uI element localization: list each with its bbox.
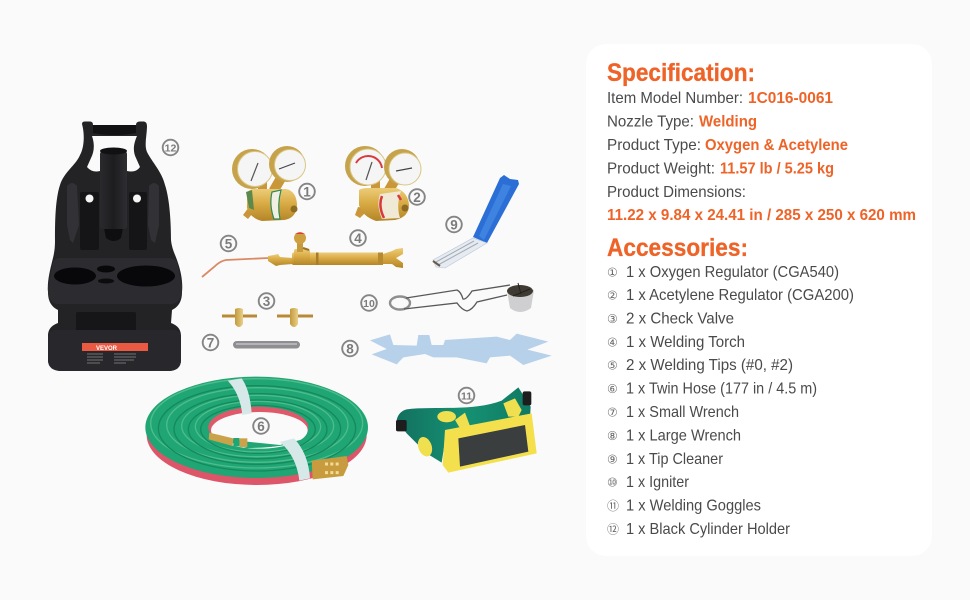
badge 9	[446, 217, 462, 232]
list: accessories	[607, 264, 854, 538]
badge 12	[163, 140, 178, 155]
list: accessories: 1 x Tip Cleaner	[626, 451, 724, 468]
badge 6	[253, 418, 269, 434]
icon: tip cleaner	[433, 175, 519, 268]
list: accessories: 1 x Black Cylinder Holder	[626, 521, 791, 538]
badge 4	[350, 230, 366, 246]
text block: specification rows: 11.22 x 9.84 x 24.41 in / 285 x 250 x 620 mm	[607, 207, 916, 224]
panel: specification and accessories card	[586, 44, 932, 556]
badge 7	[203, 335, 218, 350]
badge 8	[342, 341, 358, 356]
label: VEVOR sticker	[82, 343, 148, 363]
badge 4: 4	[354, 231, 362, 246]
text block: specification rows: Welding	[699, 114, 757, 130]
icon: check valves	[222, 308, 313, 327]
list: accessories: 1 x Welding Torch	[626, 334, 745, 351]
list: accessories: ⑦	[607, 406, 618, 420]
list: accessories: 1 x Igniter	[626, 474, 690, 491]
text block: specification rows: Oxygen & Acetylene	[705, 137, 848, 154]
text block: specification rows	[607, 90, 916, 224]
list: accessories: ⑥	[607, 382, 618, 396]
text block: specification rows: 1C016-0061	[748, 90, 833, 107]
badge 1: 1	[303, 184, 311, 199]
list: accessories: ⑫	[607, 522, 619, 536]
text block: specification rows: Item Model Number:	[607, 90, 743, 107]
badge 3	[259, 293, 274, 309]
badge 3: 3	[263, 294, 271, 309]
badge 5: 5	[225, 236, 233, 251]
list: accessories: ②	[607, 288, 618, 302]
text block: specification rows: Nozzle Type:	[607, 114, 694, 130]
badge 6: 6	[257, 419, 265, 434]
list: accessories: 1 x Large Wrench	[626, 428, 741, 444]
icon: twin hose	[145, 377, 368, 485]
icon: small wrench	[233, 341, 300, 348]
heading: specification: Specification:	[607, 59, 755, 87]
list: accessories: 2 x Check Valve	[626, 310, 734, 328]
badge 2	[409, 189, 425, 205]
badge 5	[221, 236, 236, 251]
list: accessories: ⑨	[607, 452, 618, 466]
badge 10	[361, 295, 377, 311]
icon: black cylinder holder	[48, 122, 182, 371]
text block: specification rows: Product Dimensions:	[607, 184, 746, 201]
list: accessories: 1 x Oxygen Regulator (CGA540)	[626, 264, 839, 281]
badge 1	[299, 184, 315, 199]
list: accessories: 1 x Welding Goggles	[626, 498, 761, 514]
label: VEVOR sticker: VEVOR	[96, 346, 118, 352]
badge 12: 12	[165, 142, 176, 154]
list: accessories: ⑤	[607, 358, 618, 372]
text block: specification rows: Product Type:	[607, 137, 701, 154]
list: accessories: ①	[607, 266, 618, 280]
badge 11	[459, 388, 474, 403]
list: accessories: ④	[607, 336, 618, 350]
list: accessories: 1 x Acetylene Regulator (CGA200)	[626, 287, 854, 304]
icon: igniter	[390, 283, 534, 312]
icon: large wrench	[370, 334, 552, 365]
badge 9: 9	[450, 217, 458, 232]
heading: accessories: Accessories:	[607, 234, 748, 262]
text block: specification rows: Product Weight:	[607, 160, 715, 178]
list: accessories: ⑧	[607, 429, 618, 443]
icon: acetylene regulator	[345, 146, 421, 221]
list: accessories: ③	[607, 312, 618, 326]
badge 2: 2	[413, 190, 421, 205]
list: accessories: 1 x Small Wrench	[626, 404, 739, 421]
badge 11: 11	[461, 390, 472, 402]
list: accessories: 2 x Welding Tips (#0, #2)	[626, 357, 793, 374]
icon: welding tip	[202, 258, 269, 277]
list: accessories: ⑩	[607, 476, 618, 490]
list: accessories: ⑪	[607, 499, 619, 513]
badge 7: 7	[207, 335, 214, 350]
badge 8: 8	[346, 341, 354, 356]
badge 10: 10	[363, 298, 375, 310]
icon: oxygen regulator	[232, 146, 306, 221]
icon: welding goggles	[396, 387, 537, 473]
text block: specification rows: 11.57 lb / 5.25 kg	[720, 160, 834, 178]
list: accessories: 1 x Twin Hose (177 in / 4.5 m)	[626, 380, 817, 398]
icon: welding torch	[268, 232, 403, 268]
